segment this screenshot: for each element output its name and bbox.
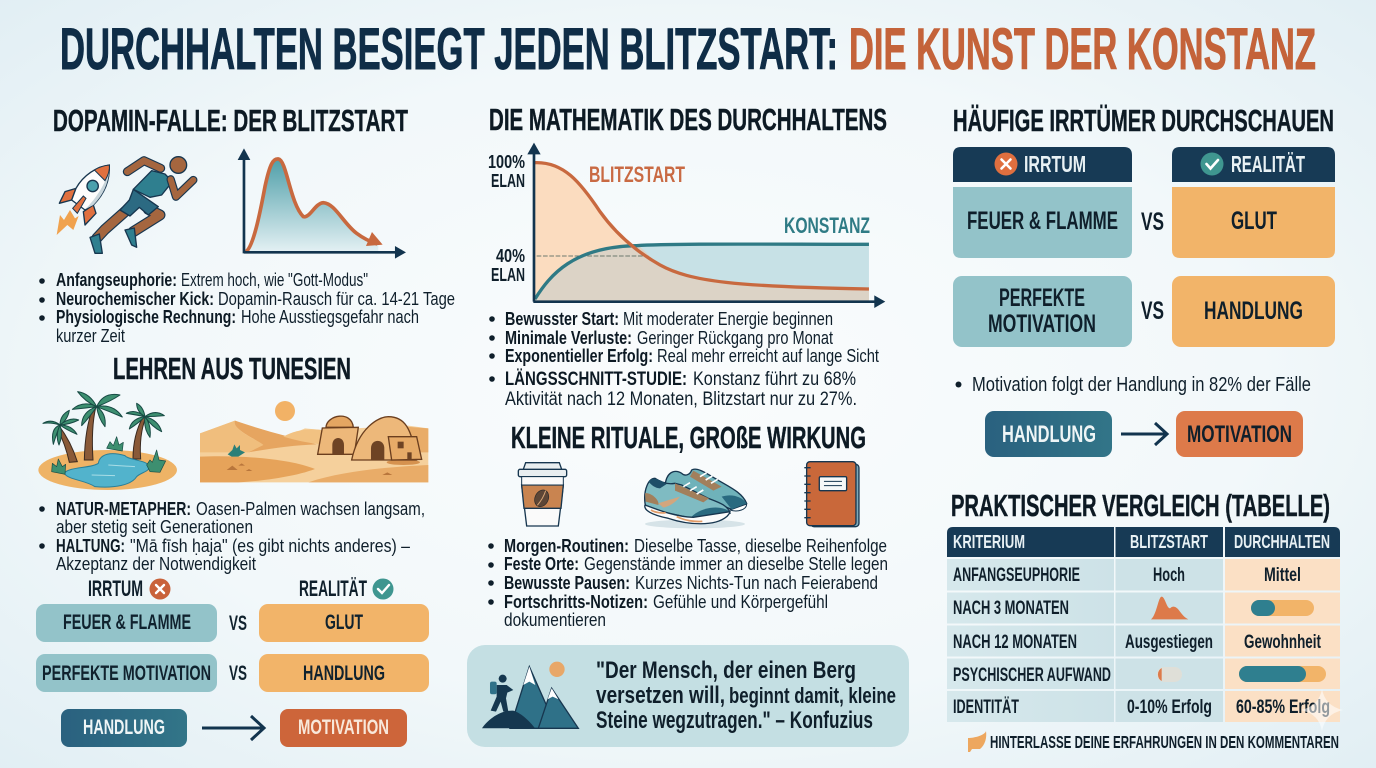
panel: Dopamin-Falle bbox=[39, 103, 455, 346]
mini chart: Blitzstart nach 3 Monaten bbox=[1151, 597, 1188, 619]
text block: Mathematik bullets: Exponentieller Erfolg: bbox=[505, 346, 653, 366]
text block: Dopamin bullets: Neurochemischer Kick: bbox=[56, 289, 214, 309]
comparison table: Mittel bbox=[1264, 565, 1301, 586]
comparison table: PSYCHISCHER AUFWAND bbox=[953, 665, 1111, 686]
chart: Blitzstart vs Konstanz bbox=[488, 143, 885, 308]
comparison table: NACH 12 MONATEN bbox=[953, 632, 1077, 653]
heading: Lehren aus Tunesien: LEHREN AUS TUNESIEN bbox=[113, 351, 351, 386]
text block: Mathematik bullets: LÄNGSSCHNITT-STUDIE: bbox=[505, 369, 687, 390]
comparison table: IDENTITÄT bbox=[953, 697, 1019, 718]
text block: Dopamin bullets: Extrem hoch, wie "Gott-Modus" bbox=[181, 270, 368, 290]
text block: Dopamin bullets: Anfangseuphorie: bbox=[56, 270, 177, 290]
text block: Rituale bullets: Kurzes Nichts-Tun nach Feierabend bbox=[635, 573, 878, 593]
text block: Tunesien bullets: aber stetig seit Generationen bbox=[56, 517, 253, 537]
text block: Tunesien bullets bbox=[39, 499, 425, 574]
comparison table: KRITERIUM bbox=[953, 532, 1025, 552]
text block: Mathematik bullets bbox=[489, 309, 879, 410]
text block: 82% bullet: Motivation folgt der Handlung in 82% der Fälle bbox=[972, 374, 1311, 396]
chart: Blitzstart vs Konstanz: ELAN bbox=[491, 171, 525, 191]
comparison: Irrtum vs Realität: GLUT bbox=[325, 611, 363, 634]
text block: Tunesien bullets: Oasen-Palmen wachsen langsam, bbox=[196, 499, 425, 519]
title: DURCHHALTEN BESIEGT JEDEN BLITZSTART: bbox=[60, 17, 838, 82]
comparison table: Gewohnheit bbox=[1244, 632, 1321, 653]
flow: Handlung to Motivation: HANDLUNG bbox=[1002, 421, 1096, 448]
text block: Mathematik bullets: Aktivität nach 12 Monaten, Blitzstart nur zu 27%. bbox=[505, 389, 857, 410]
text block: Rituale bullets: Dieselbe Tasse, dieselbe Reihenfolge bbox=[634, 536, 887, 556]
comparison: Irrtum vs Realität: IRRTUM bbox=[88, 576, 143, 601]
callout: Konfuzius quote: versetzen will, bbox=[596, 682, 725, 709]
comparison: Irrtum vs Realität: VS bbox=[229, 662, 247, 685]
flow: Handlung to Motivation: HANDLUNG bbox=[83, 716, 165, 739]
icon: mountain climber bbox=[482, 662, 578, 728]
text block: Mathematik bullets: Minimale Verluste: bbox=[505, 328, 632, 348]
text block: Mathematik bullets: Real mehr erreicht auf lange Sicht bbox=[657, 346, 879, 366]
text block: Tunesien bullets: Akzeptanz der Notwendigkeit bbox=[56, 554, 256, 574]
comparison table: 60-85% Erfolg bbox=[1236, 697, 1330, 718]
text block: Tunesien bullets: "Mā fīsh ḥaja" (es gibt nichts anderes) – bbox=[130, 536, 410, 556]
progress pill: Durchhalten nach 3 Monaten bbox=[1251, 600, 1314, 616]
heading: Mathematik: DIE MATHEMATIK DES DURCHHALTENS bbox=[489, 102, 887, 137]
comparison row: Perfekte Motivation vs Handlung: HANDLUNG bbox=[1204, 297, 1303, 325]
comparison table: ANFANGSEUPHORIE bbox=[953, 565, 1080, 586]
progress pill: Blitzstart Aufwand bbox=[1157, 667, 1182, 682]
text block: Dopamin bullets: Hohe Ausstiegsgefahr nach bbox=[241, 307, 419, 327]
text block: Rituale bullets: dokumentieren bbox=[504, 610, 606, 630]
text block: Dopamin bullets: Dopamin-Rausch für ca. 14-21 Tage bbox=[218, 289, 455, 309]
chart: Blitzstart vs Konstanz: ELAN bbox=[491, 265, 525, 285]
text block: Dopamin bullets bbox=[39, 270, 455, 346]
table header: Irrtum: IRRTUM bbox=[1024, 151, 1086, 177]
text block: Tunesien bullets: HALTUNG: bbox=[56, 536, 125, 556]
panel: Praktischer Vergleich bbox=[947, 488, 1343, 752]
flow: Handlung to Motivation bbox=[61, 709, 407, 747]
flow: Handlung to Motivation bbox=[985, 411, 1303, 457]
comparison row: Feuer & Flamme vs Glut: FEUER & FLAMME bbox=[967, 207, 1118, 235]
text block: Mathematik bullets: Mit moderater Energie beginnen bbox=[623, 309, 833, 329]
heading: Dopamin-Falle: DOPAMIN-FALLE: DER BLITZSTART bbox=[53, 103, 408, 138]
comparison table: Ausgestiegen bbox=[1125, 632, 1213, 653]
text block: Mathematik bullets: Geringer Rückgang pro Monat bbox=[637, 328, 833, 348]
comparison table bbox=[947, 527, 1340, 722]
progress pill: Durchhalten Aufwand bbox=[1239, 666, 1326, 682]
comparison: Irrtum vs Realität: REALITÄT bbox=[299, 576, 367, 601]
comparison table: Hoch bbox=[1153, 565, 1185, 586]
text block: Rituale bullets: Bewusste Pausen: bbox=[504, 573, 630, 593]
flow: Handlung to Motivation: MOTIVATION bbox=[298, 716, 389, 739]
callout: Konfuzius quote: beginnt damit, kleine bbox=[729, 683, 896, 708]
text block: Mathematik bullets: Konstanz führt zu 68% bbox=[693, 369, 856, 390]
callout: Konfuzius quote: "Der Mensch, der einen Berg bbox=[596, 657, 856, 684]
icon: coffee cup bbox=[518, 463, 567, 526]
table header: Realität: REALITÄT bbox=[1231, 151, 1305, 177]
chart: Blitzstart vs Konstanz: BLITZSTART bbox=[589, 162, 685, 187]
text block: Tunesien bullets: NATUR-METAPHER: bbox=[56, 499, 191, 519]
text block: Rituale bullets bbox=[488, 536, 888, 630]
text block: Rituale bullets: Fortschritts-Notizen: bbox=[504, 592, 648, 612]
callout: Konfuzius quote: Steine wegzutragen." – Konfuzius bbox=[596, 707, 873, 734]
callout: Konfuzius quote bbox=[467, 645, 909, 747]
text block: Rituale bullets: Gegenstände immer an dieselbe Stelle legen bbox=[584, 554, 888, 574]
icon: running shoes bbox=[645, 469, 747, 528]
panel: Kleine Rituale bbox=[467, 420, 909, 747]
table header: Realität bbox=[1172, 147, 1335, 182]
panel: Häufige Irrtümer bbox=[953, 103, 1335, 457]
comparison table: NACH 3 MONATEN bbox=[953, 598, 1069, 619]
chart: Blitzstart vs Konstanz: 100% bbox=[488, 152, 525, 172]
comparison row: Perfekte Motivation vs Handlung: VS bbox=[1141, 297, 1164, 325]
comparison row: Perfekte Motivation vs Handlung: PERFEKTE bbox=[999, 284, 1085, 312]
watermark sparkle bbox=[1301, 689, 1343, 731]
comparison: Irrtum vs Realität: FEUER & FLAMME bbox=[63, 611, 191, 634]
comparison: Irrtum vs Realität: HANDLUNG bbox=[303, 662, 385, 685]
text block: Dopamin bullets: Physiologische Rechnung: bbox=[56, 307, 236, 327]
comparison table: 0-10% Erfolg bbox=[1127, 697, 1212, 718]
icon: rocket and runner bbox=[57, 157, 193, 253]
text block: Rituale bullets: Gefühle und Körpergefühl bbox=[653, 592, 828, 612]
chart: Blitzstart vs Konstanz: 40% bbox=[496, 246, 525, 266]
panel: Mathematik des Durchhaltens bbox=[488, 102, 887, 410]
comparison: Irrtum vs Realität bbox=[36, 576, 429, 692]
chart: Blitzstart vs Konstanz: KONSTANZ bbox=[784, 213, 870, 238]
comparison row: Feuer & Flamme vs Glut: GLUT bbox=[1231, 207, 1277, 235]
comparison: Irrtum vs Realität: PERFEKTE MOTIVATION bbox=[42, 662, 211, 685]
icon: oasis with palms bbox=[38, 392, 177, 490]
text block: Dopamin bullets: kurzer Zeit bbox=[56, 326, 125, 346]
comparison: Irrtum vs Realität: VS bbox=[229, 612, 247, 635]
icon: notebook bbox=[804, 462, 859, 527]
comparison row: Feuer & Flamme vs Glut: VS bbox=[1141, 208, 1164, 236]
panel: Lehren aus Tunesien bbox=[36, 351, 429, 747]
text block: Rituale bullets: Feste Orte: bbox=[504, 554, 579, 574]
comparison row: Perfekte Motivation vs Handlung bbox=[953, 276, 1335, 347]
comparison table: BLITZSTART bbox=[1130, 532, 1208, 552]
comparison table: DURCHHALTEN bbox=[1234, 532, 1330, 552]
chart: dopamine curve bbox=[238, 148, 406, 259]
comparison row: Perfekte Motivation vs Handlung: MOTIVATION bbox=[988, 310, 1096, 338]
icon: desert with domed houses bbox=[200, 401, 428, 482]
text block: Rituale bullets: Morgen-Routinen: bbox=[504, 536, 629, 556]
flow: Handlung to Motivation: MOTIVATION bbox=[1187, 421, 1292, 448]
text block: Mathematik bullets: Bewusster Start: bbox=[505, 309, 619, 329]
heading: Kleine Rituale: KLEINE RITUALE, GROßE WIRKUNG bbox=[511, 420, 866, 455]
comparison row: Feuer & Flamme vs Glut bbox=[953, 187, 1335, 258]
table header: Irrtum bbox=[953, 147, 1132, 182]
